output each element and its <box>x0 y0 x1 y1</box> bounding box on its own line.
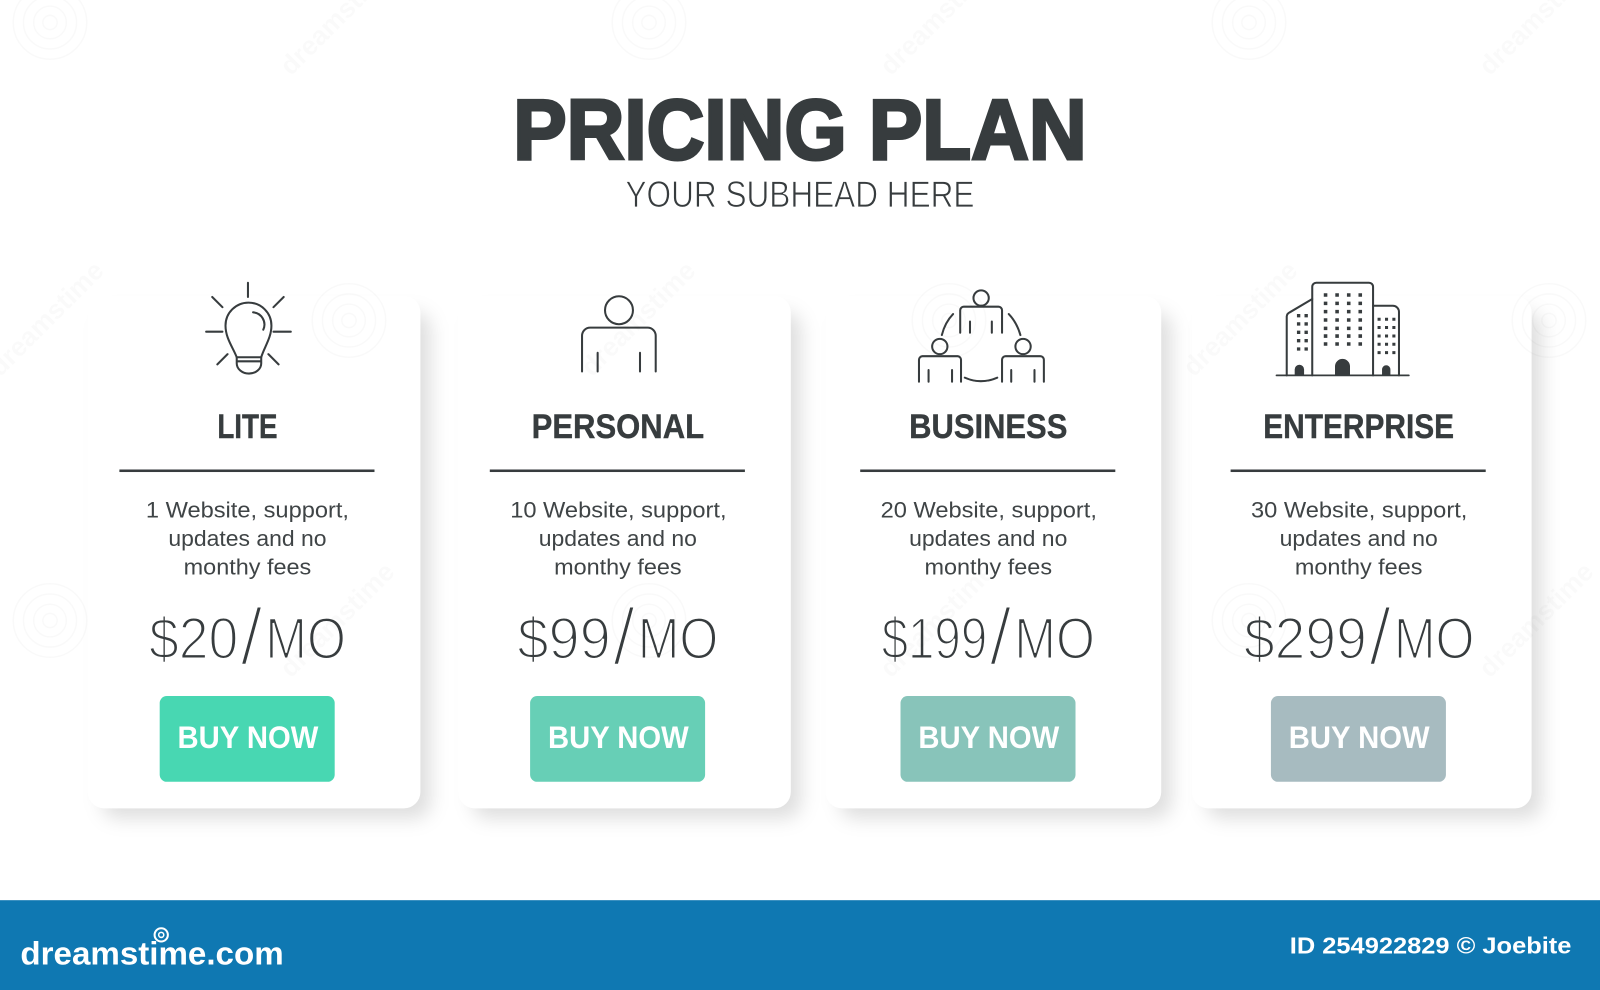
description <box>1251 497 1467 580</box>
price: / <box>240 592 263 682</box>
divider <box>490 469 745 472</box>
description <box>146 497 349 580</box>
buy button <box>901 696 1076 782</box>
icon: office buildings <box>1277 283 1409 375</box>
card <box>458 296 791 808</box>
buy button <box>1271 696 1446 782</box>
plan name: PERSONAL <box>532 408 704 446</box>
price: $99 <box>517 606 611 671</box>
price: / <box>1369 592 1392 682</box>
price: / <box>613 592 636 682</box>
description: 30 Website, support, <box>1251 497 1467 522</box>
price: / <box>989 592 1012 682</box>
price: MO <box>638 606 718 671</box>
divider <box>119 469 374 472</box>
faint background watermarks: dreamstime <box>575 255 701 382</box>
description: 20 Website, support, <box>881 497 1097 522</box>
card <box>826 296 1161 808</box>
card <box>1192 296 1532 808</box>
panel: business plan <box>826 290 1171 819</box>
price: $20 <box>149 606 238 671</box>
panel: personal plan <box>458 296 801 819</box>
divider <box>860 469 1115 472</box>
buy button <box>160 696 335 782</box>
buy button: BUY NOW <box>1289 719 1430 755</box>
card shadow <box>472 312 801 819</box>
panel: lite plan <box>88 283 431 819</box>
description: monthy fees <box>924 555 1052 580</box>
price <box>149 592 346 682</box>
footer credit: ID 254922829 © Joebite <box>1290 932 1571 958</box>
price <box>1244 592 1474 682</box>
description: updates and no <box>1280 526 1438 551</box>
title: PRICING PLAN <box>513 82 1087 178</box>
faint background watermarks: dreamstime <box>1177 255 1303 382</box>
card shadow <box>1206 312 1542 819</box>
description: updates and no <box>168 526 327 551</box>
footer bar <box>0 900 1600 990</box>
description: monthy fees <box>554 555 682 580</box>
price <box>882 592 1095 682</box>
plan name: BUSINESS <box>909 408 1067 446</box>
faint background watermarks: dreamstime <box>874 556 1000 683</box>
icon: team of three <box>919 290 1044 382</box>
plan name: LITE <box>217 408 278 446</box>
price: $299 <box>1244 606 1367 671</box>
plan name: ENTERPRISE <box>1263 408 1454 446</box>
price: MO <box>1394 606 1474 671</box>
divider <box>1231 469 1486 472</box>
footer logo: dreamstime.com <box>20 934 284 971</box>
description: monthy fees <box>184 555 311 580</box>
icon: light bulb <box>206 283 291 374</box>
description: monthy fees <box>1295 555 1422 580</box>
faint background watermarks: dreamstime <box>1473 556 1599 683</box>
icon: person <box>582 296 656 372</box>
price: $199 <box>882 606 987 671</box>
description: 1 Website, support, <box>146 497 349 522</box>
buy button: BUY NOW <box>548 719 689 755</box>
description: updates and no <box>909 526 1067 551</box>
price: MO <box>265 606 346 671</box>
price <box>517 592 718 682</box>
buy button: BUY NOW <box>918 719 1059 755</box>
buy button: BUY NOW <box>178 719 318 755</box>
buy button <box>530 696 705 782</box>
panel: enterprise plan <box>1192 283 1542 819</box>
faint background watermarks <box>0 0 1599 683</box>
card shadow <box>102 312 431 819</box>
description: 10 Website, support, <box>510 497 727 522</box>
description <box>510 497 727 580</box>
description: updates and no <box>539 526 697 551</box>
card <box>88 296 420 808</box>
card shadow <box>840 312 1171 819</box>
faint background watermarks: dreamstime <box>274 556 400 683</box>
price: MO <box>1014 606 1095 671</box>
description <box>881 497 1097 580</box>
subheading: YOUR SUBHEAD HERE <box>626 174 974 215</box>
